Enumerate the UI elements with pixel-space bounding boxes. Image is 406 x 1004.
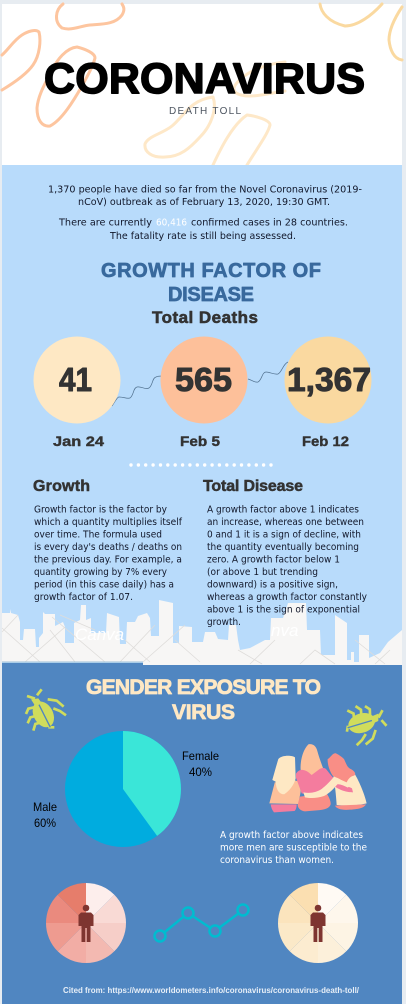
body text: growth	[34, 504, 183, 603]
body text: total disease	[207, 504, 367, 628]
subtitle: DEATH TOLL	[169, 106, 241, 117]
body text: total disease: above 1 is the sign of exponential	[207, 604, 360, 616]
body text: total disease: 0 and 1 it is a sign of decline, with	[207, 530, 361, 540]
intro text: 1,370 people have died so far from the Novel Coronavirus (2019-	[48, 184, 362, 196]
intro text	[48, 184, 362, 242]
body text: growth: over time. The formula used	[34, 530, 162, 540]
heading: gender exposure to virus	[86, 676, 321, 724]
column: total disease	[203, 478, 367, 628]
body text: growth: the previous day. For example, a	[34, 554, 182, 566]
heading: growth factor of disease: DISEASE	[168, 284, 254, 306]
body text: total disease: zero. A growth factor below 1	[207, 554, 340, 566]
body text: growth: growth factor of 1.07.	[34, 592, 133, 603]
stat: Feb 5	[160, 336, 248, 449]
body text: growth: quantity growing by 7% every	[34, 567, 167, 578]
intro text: The fatality rate is still being assessed.	[109, 231, 296, 242]
body text: total disease: whereas a growth factor constantly	[207, 592, 367, 603]
icon: bug right	[341, 703, 389, 750]
body text: total disease: downward) is a positive sign,	[207, 580, 338, 590]
stat: Feb 5: 565	[175, 361, 232, 398]
paragraph: men more susceptible: coronavirus than women.	[220, 855, 334, 866]
heading: gender exposure to virus: GENDER EXPOSURE TO	[86, 676, 321, 699]
stat: Feb 12: 1,367	[287, 361, 371, 398]
paragraph: men more susceptible: A growth factor above indicates	[220, 830, 363, 841]
intro text: There are currently	[58, 218, 152, 228]
panel: header	[2, 4, 402, 165]
label: female: Female	[182, 749, 219, 763]
stat: Jan 24: Jan 24	[53, 433, 104, 449]
heading: growth factor of disease: GROWTH FACTOR OF	[101, 260, 321, 282]
icon: bug left	[26, 689, 66, 731]
stat: Feb 5: Feb 5	[180, 433, 220, 449]
watermark: Canva	[75, 625, 124, 644]
stat: Jan 24	[34, 336, 120, 449]
watermark: nva	[271, 621, 298, 640]
body text: total disease: A growth factor above 1 indicates	[207, 504, 359, 516]
heading: growth factor of disease	[101, 260, 321, 306]
icon: yellow person wheel	[278, 883, 358, 963]
label: male	[33, 800, 57, 830]
pie chart	[33, 731, 219, 847]
body text: total disease: (or above 1 but trending	[207, 567, 318, 578]
intro text: 60,416	[156, 218, 187, 228]
paragraph: men more susceptible	[220, 830, 367, 866]
heading: growth: Growth	[33, 478, 90, 495]
squiggle connector 2	[248, 362, 288, 382]
heading: total deaths: Total Deaths	[152, 308, 258, 327]
stat: Feb 12: Feb 12	[302, 433, 349, 449]
label: female	[182, 749, 219, 779]
body text: total disease: an increase, whereas one between	[207, 517, 364, 528]
icon: group of three women	[269, 744, 367, 812]
panel: growth factor section	[2, 165, 402, 665]
icon: red person wheel	[46, 883, 126, 963]
person figure	[310, 905, 326, 942]
decorative outline blobs	[2, 4, 402, 165]
body text: growth: Growth factor is the factor by	[34, 504, 167, 516]
person figure	[78, 905, 94, 942]
label: male: 60%	[34, 816, 56, 830]
paragraph: men more susceptible: more men are susceptible to the	[220, 842, 367, 854]
label: female: 40%	[189, 765, 212, 779]
squiggle connector 1	[112, 376, 162, 406]
label: male: Male	[33, 800, 57, 814]
panel: gender exposure section	[2, 663, 402, 1004]
body text: growth: period (in this case daily) has a	[34, 580, 174, 590]
stat: Jan 24: 41	[59, 361, 92, 398]
body text: growth: which a quantity multiplies itself	[34, 517, 183, 528]
title: CORONAVIRUS	[44, 55, 365, 103]
icon: line chart	[154, 904, 248, 942]
body text: total disease: the quantity eventually becoming	[207, 542, 359, 553]
stat: Feb 12	[284, 336, 372, 449]
column: growth	[33, 478, 183, 603]
citation: Cited from: https://www.worldometers.info/coronavirus/coronavirus-death-toll/	[63, 986, 360, 995]
intro text: nCoV) outbreak as of February 13, 2020, 19:30 GMT.	[78, 197, 330, 208]
intro text: confirmed cases in 28 countries.	[191, 218, 348, 228]
body text: growth: is every day's deaths / deaths on	[34, 542, 182, 553]
skyline backdrop	[2, 600, 402, 665]
heading: gender exposure to virus: VIRUS	[172, 701, 235, 724]
body text: total disease: growth.	[207, 617, 241, 628]
heading: total disease: Total Disease	[203, 478, 303, 495]
